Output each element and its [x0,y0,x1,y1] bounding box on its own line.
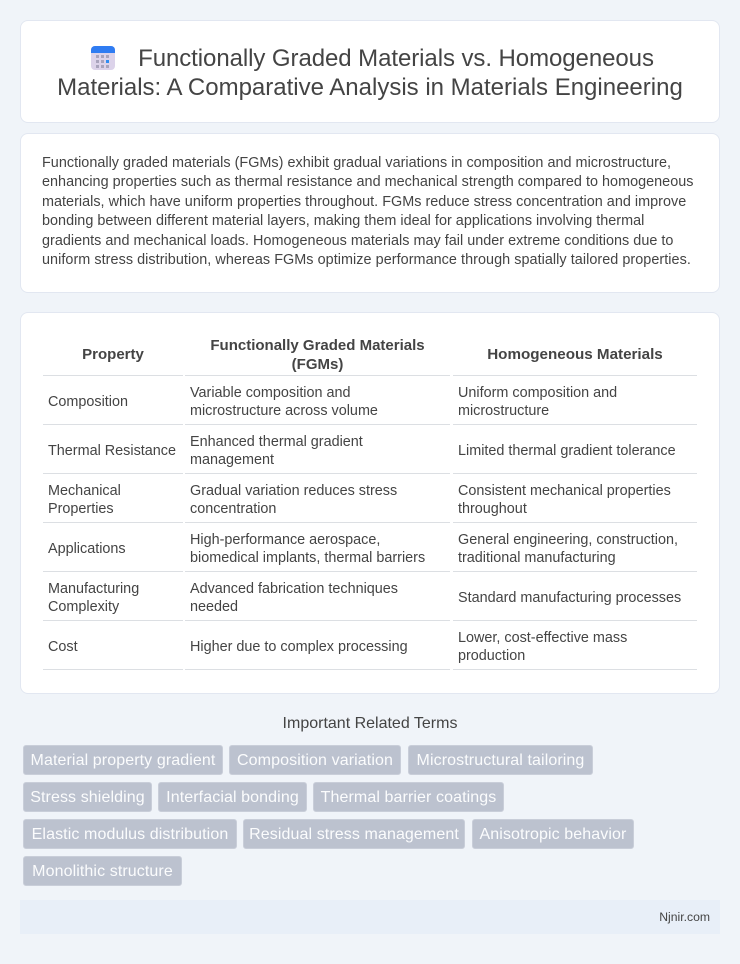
tag: Anisotropic behavior [480,826,626,843]
comparison table: Limited thermal gradient tolerance [458,443,676,459]
comparison table: Variable composition and [190,385,351,401]
tag [408,745,593,775]
summary text: bonding between different material layers, making them ideal for applications involving thermal [42,213,644,229]
summary text: uniform stress distribution, whereas FGMs optimize performance through spatially tailored properties. [42,252,691,268]
tag [313,782,504,812]
comparison table: needed [190,599,238,615]
summary text: gradients and mechanical loads. Homogeneous materials may fail under extreme conditions due to [42,233,673,249]
tag: Composition variation [237,752,393,769]
comparison table [43,337,697,670]
comparison table: Gradual variation reduces stress [190,483,397,499]
comparison table: concentration [190,501,276,517]
tag [472,819,634,849]
comparison table: General engineering, construction, [458,532,678,548]
summary text [42,155,693,268]
footer: Njnir.com [659,910,710,924]
title: Functionally Graded Materials vs. Homogeneous [138,45,654,72]
summary text: enhancing properties such as thermal resistance and mechanical strength compared to homogeneous [42,174,693,190]
footer [20,900,720,934]
tag: Residual stress management [249,826,459,843]
row: manufacturing complexity: Complexity [48,599,119,615]
tag [243,819,465,849]
tag: Microstructural tailoring [417,752,584,769]
comparison table: traditional manufacturing [458,550,616,566]
row: thermal resistance: Thermal Resistance [48,443,176,459]
heading: related terms: Important Related Terms [283,715,457,732]
tag [23,782,152,812]
column heading: homogeneous: Homogeneous Materials [487,346,663,363]
summary text: Functionally graded materials (FGMs) exhibit gradual variations in composition and microstructure, [42,155,671,171]
comparison table: Advanced fabrication techniques [190,581,398,597]
tag [23,745,223,775]
row: applications: Applications [48,541,126,557]
comparison table: microstructure [458,403,549,419]
tag: Thermal barrier coatings [321,789,496,806]
comparison table: Higher due to complex processing [190,639,408,655]
row: manufacturing complexity: Manufacturing [48,581,139,597]
comparison table: High-performance aerospace, [190,532,380,548]
row: manufacturing complexity [48,581,139,615]
comparison table: Consistent mechanical properties [458,483,671,499]
tag [23,856,182,886]
comparison table: Lower, cost-effective mass [458,630,627,646]
row: mechanical properties: Properties [48,501,114,517]
tags: related terms [23,745,634,886]
row: mechanical properties: Mechanical [48,483,121,499]
column heading: FGMs: (FGMs) [292,356,343,373]
comparison table: Enhanced thermal gradient [190,434,363,450]
title [57,45,683,101]
column heading: FGMs [210,337,425,373]
comparison table: biomedical implants, thermal barriers [190,550,425,566]
tag: Stress shielding [30,789,145,806]
panel: comparison table [20,312,720,694]
comparison table: microstructure across volume [190,403,378,419]
tag: Monolithic structure [32,863,173,880]
comparison table: Standard manufacturing processes [458,590,681,606]
panel: summary [20,133,720,293]
row: cost: Cost [48,639,78,655]
column heading: FGMs: Functionally Graded Materials [210,337,425,354]
column heading: property: Property [82,346,144,363]
row: composition: Composition [48,394,128,410]
icon: calendar [91,46,115,70]
comparison table: throughout [458,501,527,517]
tag [158,782,307,812]
comparison table: Uniform composition and [458,385,617,401]
tag [23,819,237,849]
tag: Elastic modulus distribution [32,826,228,843]
tag [229,745,401,775]
comparison table: management [190,452,274,468]
comparison table: production [458,648,525,664]
tag: Interfacial bonding [166,789,299,806]
tag: Material property gradient [31,752,215,769]
panel: header [20,20,720,123]
summary text: materials, which have uniform properties throughout. FGMs reduce stress concentration and improve [42,194,686,210]
title: Materials: A Comparative Analysis in Materials Engineering [57,74,683,101]
row: mechanical properties [48,483,121,517]
